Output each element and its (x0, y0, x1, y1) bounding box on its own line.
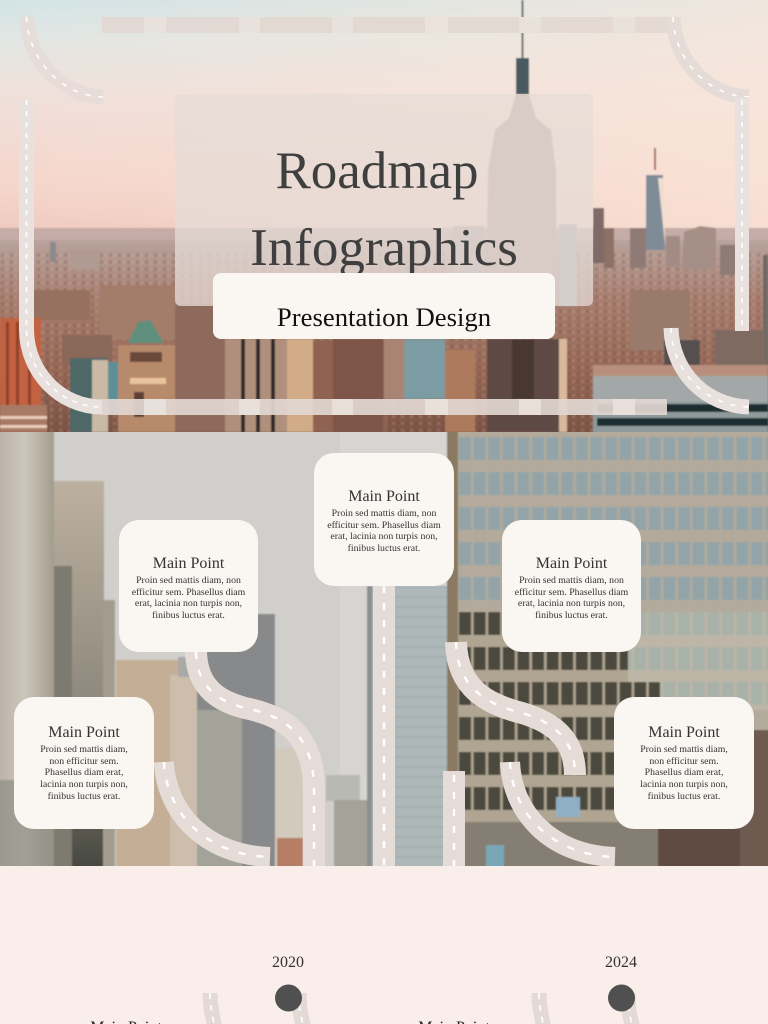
road: centre vertical (373, 586, 395, 866)
card: main point one: lacinia non turpis non, (40, 779, 128, 790)
card: main point five: Proin sed mattis diam, (640, 744, 728, 755)
road: timeline segment four (628, 993, 634, 1024)
panel: subtitle: Presentation Design (277, 302, 491, 332)
road: centre to card four S-curve (456, 642, 575, 775)
card: main point three: Proin sed mattis diam, non (332, 508, 436, 519)
card: main point five: lacinia non turpis non, (640, 779, 728, 790)
central glass tower (367, 586, 447, 873)
road: card two to bottom (196, 652, 314, 870)
card: main point one: finibus luctus erat. (48, 791, 120, 802)
road: timeline segment one (210, 993, 216, 1024)
foreground buildings (0, 318, 41, 406)
year label: 2024: 2024 (605, 954, 637, 971)
marker: 2024 (608, 984, 635, 1012)
One World Trade tower (654, 148, 656, 170)
timeline section (210, 984, 635, 1024)
card: main point one: Phasellus diam erat, (45, 767, 123, 778)
road: bottom-right curve (671, 328, 749, 407)
road: left vertical with bottom-left curve (26, 100, 102, 407)
card: main point two: efficitur sem. Phasellus diam (132, 587, 245, 598)
card: main point five: Phasellus diam erat, (645, 767, 723, 778)
Empire State tower (522, 0, 524, 62)
card: main point one: Proin sed mattis diam, (40, 744, 128, 755)
card: main point two (119, 520, 258, 652)
card: main point four: Main Point (536, 555, 607, 572)
road: short vertical (443, 771, 465, 866)
road: timeline segment three (539, 993, 545, 1024)
marker: 2020 (275, 984, 302, 1012)
card: main point one: non efficitur sem. (49, 756, 119, 767)
card: main point four: finibus luctus erat. (535, 610, 608, 621)
title (250, 142, 518, 277)
card: main point four: Proin sed mattis diam, non (519, 575, 624, 586)
title: Infographics (250, 219, 518, 277)
panel: title backdrop (175, 94, 593, 306)
card: main point five (614, 697, 754, 829)
card: main point four: efficitur sem. Phasellus diam (515, 587, 628, 598)
road: bottom straight (102, 399, 667, 415)
left towers (0, 425, 54, 873)
card: main point three (314, 453, 454, 586)
road: lower right curve (510, 762, 615, 857)
card: main point five: non efficitur sem. (649, 756, 719, 767)
card: main point five: Main Point (648, 724, 720, 741)
road: timeline segment two (299, 993, 305, 1024)
connecting roads: milestones section (164, 586, 615, 870)
panel: subtitle (213, 273, 555, 339)
card: main point three: finibus luctus erat. (348, 543, 420, 554)
city photo background section 2 (0, 425, 768, 873)
card: main point two: finibus luctus erat. (152, 610, 225, 621)
card: main point two: Proin sed mattis diam, non (136, 575, 241, 586)
card: main point four: erat, lacinia non turpis non, (518, 598, 625, 609)
road: top-right curve (673, 17, 749, 97)
road: top straight (102, 17, 668, 33)
card: main point one: Main Point (48, 724, 120, 741)
card: main point five: finibus luctus erat. (648, 791, 720, 802)
card: main point two: Main Point (153, 555, 224, 572)
frame roads: hero section (26, 17, 749, 415)
card: main point four (502, 520, 641, 652)
road: card one to bottom (164, 762, 270, 857)
road: top-left curve (26, 17, 103, 97)
skyline photo background (0, 0, 768, 440)
card: main point three: efficitur sem. Phasellus diam (327, 520, 441, 531)
card: main point two: erat, lacinia non turpis non, (135, 598, 242, 609)
card: main point one (14, 697, 154, 829)
road: right vertical (735, 97, 749, 331)
year label: 2020: 2020 (272, 954, 304, 971)
card: main point three: Main Point (348, 488, 420, 505)
card: main point three: erat, lacinia non turpis non, (330, 531, 438, 542)
title: Roadmap (275, 142, 479, 200)
right office building (446, 432, 459, 771)
